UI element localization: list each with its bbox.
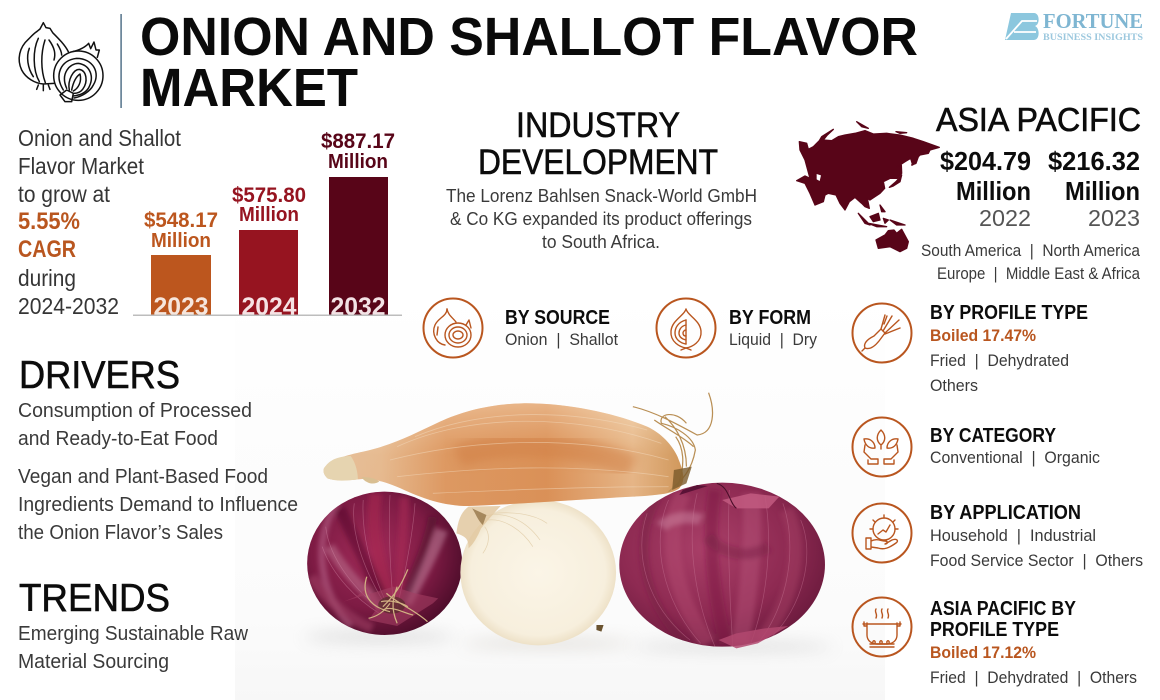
panel: by form: Liquid | Dry [729,331,818,349]
text: trend: Emerging Sustainable Raw [18,623,249,645]
text: industry development: & Co KG expanded its product offerings [450,209,752,229]
bar 2023: 2023 [154,293,208,321]
panel: by application: Household | Industrial [930,527,1096,545]
stat: 2022: $204.79 [940,146,1031,176]
text: CAGR summary: Onion and Shallot [18,125,182,151]
heading: industry development [478,106,718,182]
text: other regions: South America | North America [921,242,1141,260]
label: BY APPLICATION [930,502,1081,524]
text: driver one [18,400,252,450]
panel: Asia Pacific by profile type: Boiled 17.12% [930,643,1036,662]
bar 2023: Million [151,230,211,252]
label: BY FORM [729,307,811,329]
panel: trends [18,577,249,673]
panel: drivers [18,354,298,544]
bar 2024: 2024 [242,293,297,321]
icon: cooking pot [852,598,912,656]
red onion right [619,483,825,648]
panel: Asia Pacific by profile type: PROFILE TYPE [930,619,1059,641]
heading: drivers: DRIVERS [19,354,180,397]
panel: Asia Pacific by profile type: Fried | Dehydrated | Others [930,669,1137,687]
stat: 2023: 2023 [1088,205,1140,231]
stat: 2023: $216.32 [1048,146,1140,176]
panel: by profile type [852,302,1088,395]
label: BY SOURCE [505,307,610,329]
photo: onions and shallot [304,393,833,651]
text: CAGR summary: 5.55% [18,208,80,235]
icon: onions header [19,23,103,102]
stat: 2023: Million [1065,176,1140,206]
icon: spring onion [852,304,912,362]
photo background [235,295,885,700]
map: Asia Pacific [797,122,939,252]
panel: Asia Pacific by profile type [852,598,1137,687]
panel: by source: Onion | Shallot [505,331,618,349]
text: CAGR summary: 2024-2032 [18,293,119,319]
bar 2024: $575.80 [232,184,306,207]
text: other regions: Europe | Middle East & Africa [937,265,1141,283]
panel: by category: Conventional | Organic [930,449,1100,467]
text: CAGR summary [18,125,182,319]
logo: Fortune Business Insights: BUSINESS INSIGHTS [1043,33,1143,43]
label: ASIA PACIFIC BY [930,598,1077,620]
panel: by form [656,298,818,358]
heading: industry development: DEVELOPMENT [478,143,718,182]
stat: 2022: Million [956,176,1031,206]
text: trend [18,623,249,673]
bar 2032: $887.17 [321,130,395,153]
heading: industry development: INDUSTRY [516,106,680,145]
bar 2024 [232,184,306,321]
text: CAGR summary: to grow at [18,181,111,207]
icon: onion and slice [424,298,482,358]
panel: by application: Food Service Sector | Others [930,552,1143,570]
text: trend: Material Sourcing [18,651,169,673]
text: driver two: Vegan and Plant-Based Food [18,466,268,488]
text: driver two [18,466,298,544]
title: ONION AND SHALLOT FLAVOR [140,7,918,67]
label: BY PROFILE TYPE [930,302,1088,324]
bar 2023 [144,209,218,321]
text: CAGR summary: CAGR [18,236,76,263]
logo: Fortune Business Insights [1005,9,1143,43]
icon: hands with leaves [852,418,912,476]
shallot [322,393,712,510]
text: CAGR summary: during [18,265,76,291]
panel: by application [852,502,1143,570]
text: driver one: Consumption of Processed [18,400,252,422]
bar 2032 [321,130,395,321]
white onion [456,500,616,645]
logo mark [1005,13,1039,40]
text: driver two: the Onion Flavor’s Sales [18,522,223,544]
title: MARKET [140,58,358,118]
red onion left [307,492,462,635]
panel: by profile type: Boiled 17.47% [930,326,1036,345]
text: driver two: Ingredients Demand to Influence [18,494,298,516]
panel: by profile type: Others [930,377,978,395]
stat: 2022: 2022 [979,205,1031,231]
panel: by profile type: Fried | Dehydrated [930,352,1069,370]
text: driver one: and Ready-to-Eat Food [18,428,218,450]
title [140,7,918,118]
panel: by category [852,418,1100,476]
logo text: FORTUNE [1043,9,1143,33]
panel: by source [424,298,618,358]
icon: onion cross section [656,298,716,358]
text: CAGR summary: Flavor Market [18,153,145,179]
left onion root [365,569,427,623]
bar 2024: Million [239,204,299,226]
icon: hand with gear [852,504,912,562]
text: industry development: to South Africa. [542,232,660,252]
bar 2023: $548.17 [144,209,218,232]
heading: Asia Pacific: ASIA PACIFIC [936,101,1141,138]
stat: 2023 [1048,146,1140,231]
text: industry development [446,186,757,252]
bar 2032: Million [328,151,388,173]
label: BY CATEGORY [930,425,1057,447]
stat: 2022 [940,146,1031,231]
text: industry development: The Lorenz Bahlsen Snack-World GmbH [446,186,757,206]
header divider [120,14,122,108]
text: other regions [921,242,1141,283]
heading: trends: TRENDS [19,577,170,620]
bar 2032: 2032 [330,293,386,321]
bar chart [133,130,402,321]
